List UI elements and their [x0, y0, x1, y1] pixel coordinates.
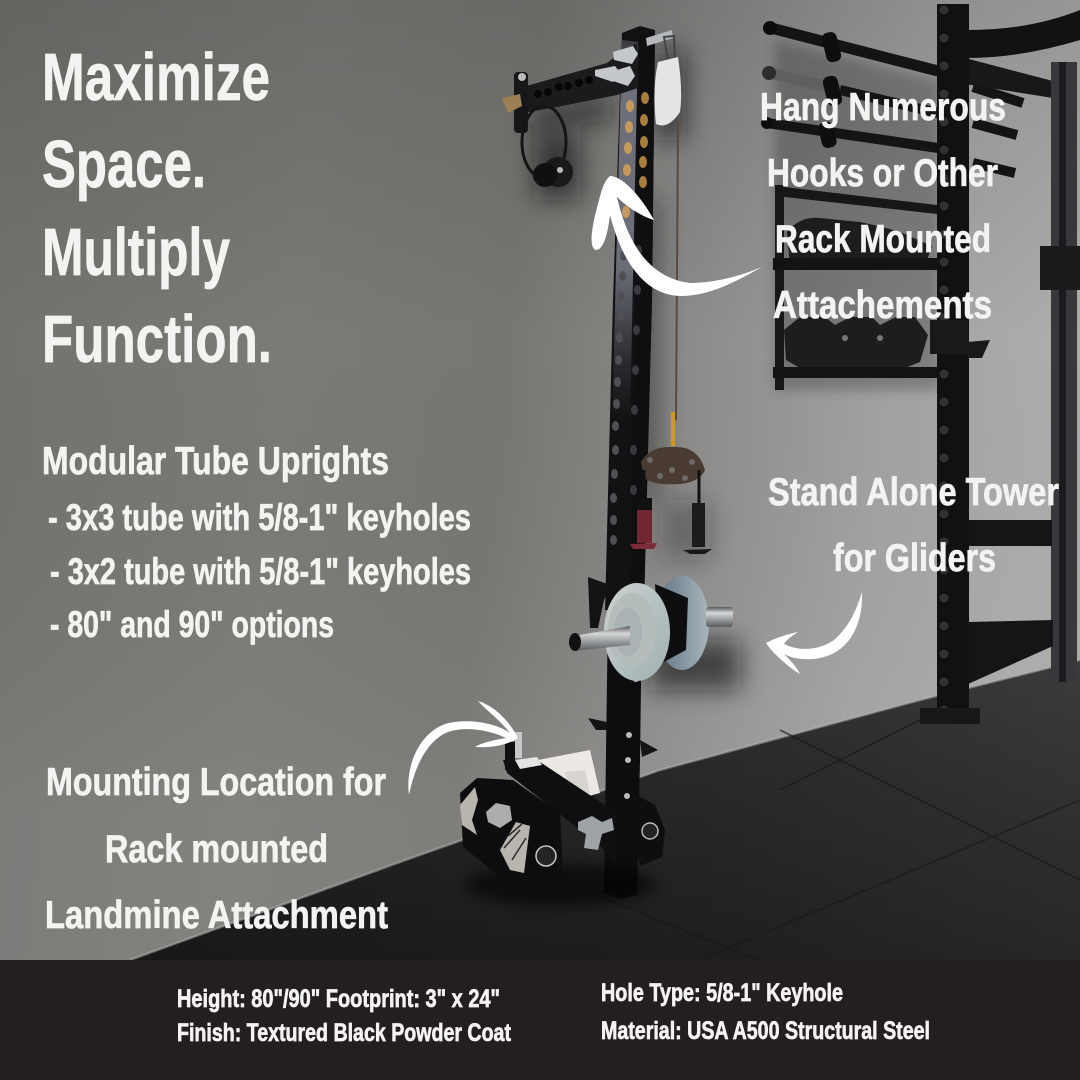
callout: hooks and attachments: Hooks or Other — [767, 152, 998, 195]
handle plate — [641, 447, 705, 484]
text block: modular tube uprights: Modular Tube Uprights — [42, 440, 389, 483]
title: Maximize — [42, 40, 270, 115]
callout: landmine mounting: Mounting Location for — [46, 761, 386, 804]
bottom specification bar — [0, 960, 1080, 1080]
arrow: to landmine mount — [408, 701, 518, 795]
tower body — [605, 26, 655, 610]
title: Function. — [42, 302, 272, 377]
callout: stand alone tower — [768, 471, 1059, 580]
spec: hole type: Hole Type: 5/8-1" Keyhole — [601, 979, 843, 1007]
text block: modular tube uprights — [42, 440, 471, 645]
cable arm — [523, 43, 638, 113]
text block: modular tube uprights: - 3x3 tube with 5/8-1" keyholes — [48, 497, 471, 538]
text block: modular tube uprights: - 3x2 tube with 5/8-1" keyholes — [50, 551, 471, 592]
text block: modular tube uprights: - 80" and 90" options — [50, 604, 334, 645]
callout: hooks and attachments — [760, 86, 1006, 327]
callout: landmine mounting: Landmine Attachment — [45, 894, 388, 937]
hanging pulley with cable — [522, 106, 566, 178]
title: Space. — [42, 127, 206, 202]
landmine attachment and dumbbell — [460, 732, 665, 907]
callout: landmine mounting — [45, 761, 388, 937]
tower upright with attachments — [502, 26, 740, 899]
callout: stand alone tower: for Gliders — [833, 537, 996, 580]
arrow: to top hooks — [592, 176, 762, 296]
spec: height and footprint: Height: 80"/90" Footprint: 3" x 24" — [177, 985, 500, 1013]
callout: hooks and attachments: Rack Mounted — [775, 218, 991, 261]
spec: finish: Finish: Textured Black Powder Coat — [177, 1019, 512, 1047]
arrow: to glider tower — [766, 592, 862, 674]
callout: hooks and attachments: Attachements — [773, 284, 992, 327]
callout: landmine mounting: Rack mounted — [105, 828, 328, 871]
rack and storage on the right wall — [761, 4, 1080, 724]
callout: hooks and attachments: Hang Numerous — [760, 86, 1006, 129]
title: Multiply — [42, 215, 230, 290]
glider plates — [588, 577, 610, 628]
title — [42, 40, 272, 377]
spec: material: Material: USA A500 Structural Steel — [601, 1017, 930, 1045]
